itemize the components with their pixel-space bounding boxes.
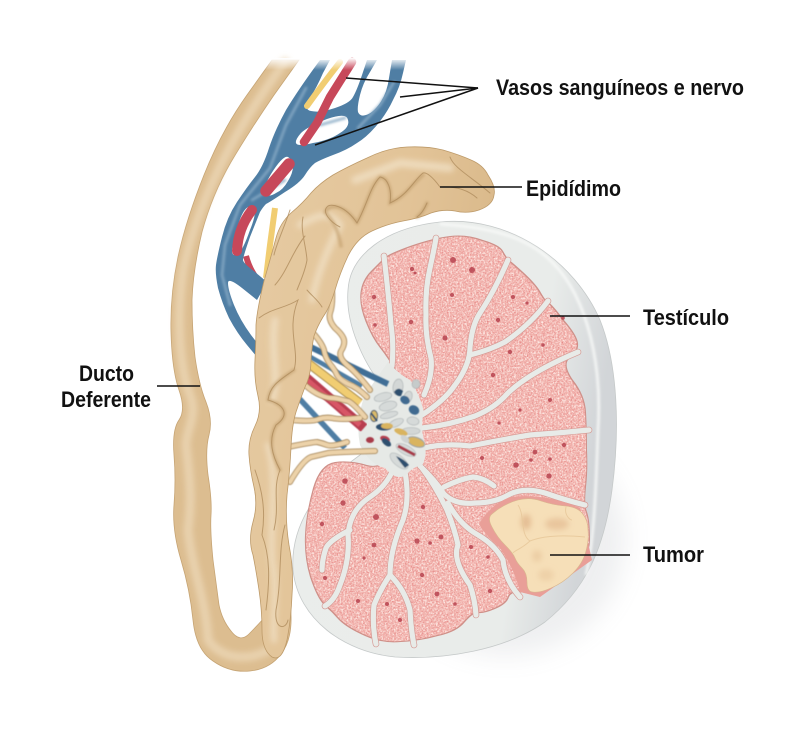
efferent ductules [288,290,375,482]
hilum mediastinum [358,362,426,477]
septa rim [322,238,589,645]
label: vas deferens: Ducto [79,361,134,386]
vein highlights [222,82,394,305]
spermatic vessels fanning toward the hilum [296,342,388,448]
leader lines: vessels and nerve [315,78,478,145]
testicle shell [293,221,616,658]
lower artery segment [246,256,262,285]
tumor [479,496,592,597]
label: epididymis: Epidídimo [526,176,621,201]
artery and nerve over the veins [237,62,352,251]
yellow nerve behind veins [266,208,275,278]
epididymis [249,147,494,658]
hilum duct cross sections [366,378,426,472]
epididymis fold lines [255,157,490,627]
top fade of cord [260,58,420,70]
label: testicle: Testículo [643,305,729,330]
leader line: tumor [550,554,630,556]
label: vas deferens: Deferente [61,387,151,412]
front plate fold of testicle shell [440,224,599,575]
epididymis soft shadows [268,175,427,470]
vas deferens [171,60,299,671]
label: vas deferens [61,361,151,412]
leader line: testicle [550,315,630,317]
vein network [216,60,406,357]
blood vessels network [216,60,406,357]
testicle drop shadow [385,425,625,655]
label: blood vessels and nerve: Vasos sanguíneos e nervo [496,75,744,100]
leader line: epididymis [440,186,522,188]
lobule blood vessel dots [320,257,566,622]
epididymis highlights [268,163,450,640]
septa between lobules [322,238,589,645]
testicular parenchyma [305,236,590,642]
leader line: vas deferens [157,385,200,387]
label: tumor: Tumor [643,542,704,567]
nerve and artery to hilum [304,360,364,428]
